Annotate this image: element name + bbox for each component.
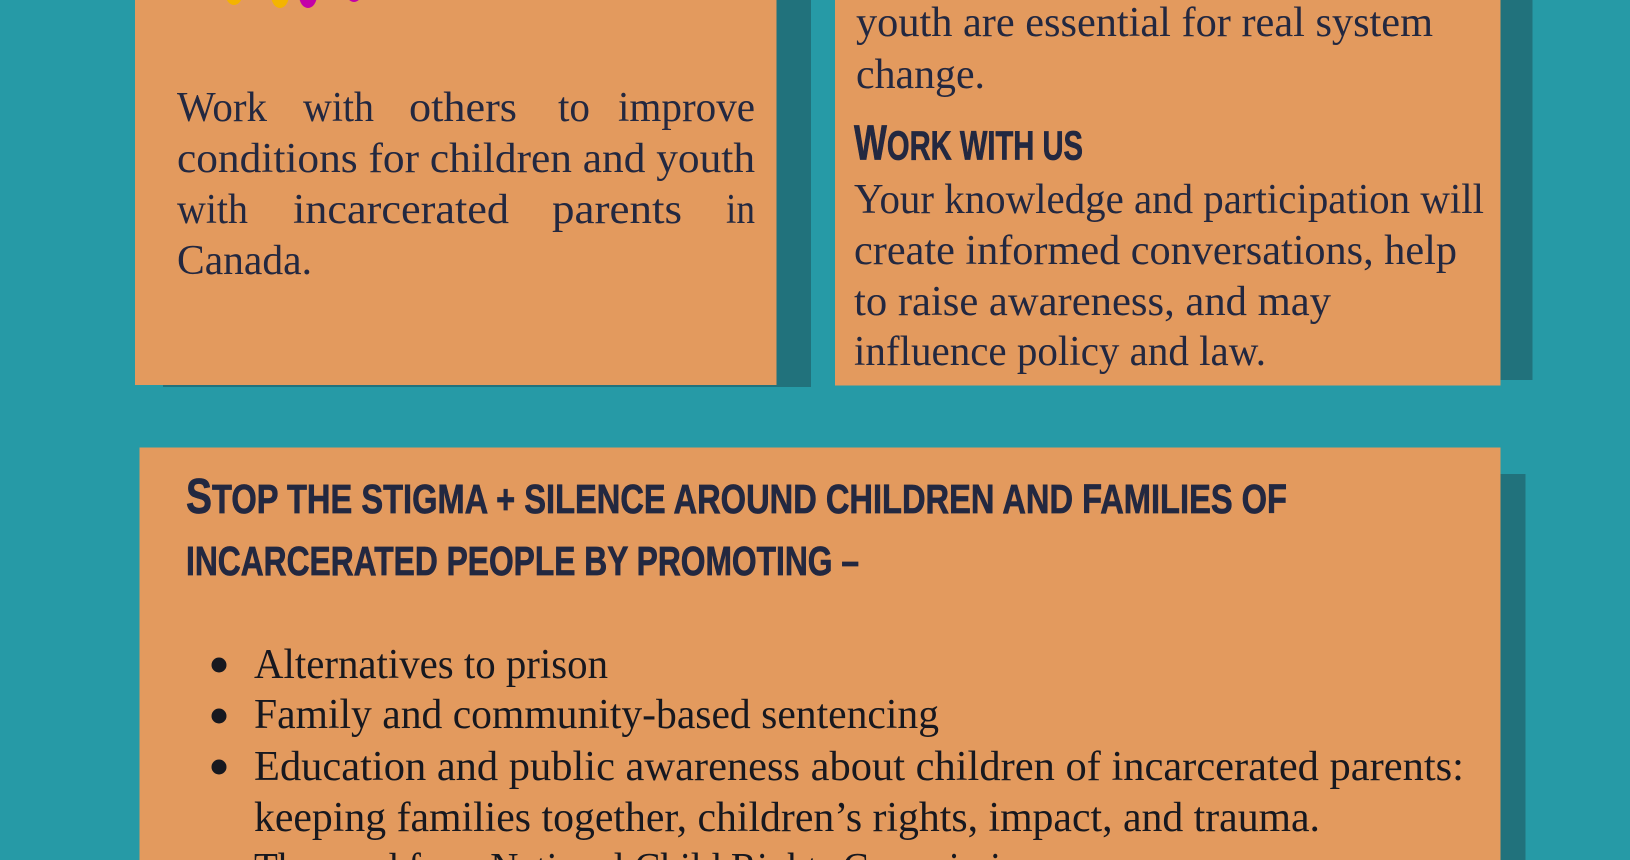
heading: stop the stigma	[186, 470, 1287, 584]
heading: stop the stigma: INCARCERATED PEOPLE BY PROMOTING –	[186, 538, 859, 584]
text: your knowledge: to raise awareness, and may	[854, 279, 1331, 325]
text: system change: change.	[856, 52, 985, 98]
panel: stop the stigma	[140, 448, 1526, 860]
heading: work with us: WORK WITH US	[854, 116, 1083, 170]
text: work with others: with	[177, 187, 248, 233]
text: your knowledge: Your knowledge and participation will	[854, 177, 1484, 223]
list: promoted actions: Education and public awareness about children of incarcerated parents:	[254, 744, 1464, 790]
text: work with others: with	[303, 85, 374, 131]
text: work with others: in	[726, 187, 755, 233]
text: your knowledge	[854, 177, 1484, 375]
icon: coloured dots	[225, 0, 363, 8]
text: your knowledge: create informed conversations, help	[854, 228, 1457, 274]
text: work with others: Canada.	[177, 238, 312, 284]
text: system change: youth are essential for real system	[856, 0, 1433, 46]
text: system change	[856, 0, 1433, 98]
text: work with others: conditions for children and youth	[177, 136, 755, 182]
text: your knowledge: influence policy and law.	[854, 329, 1266, 375]
list: promoted actions: Family and community-based sentencing	[254, 692, 939, 738]
panel: work with others	[135, 0, 811, 387]
list: promoted actions	[212, 642, 1464, 860]
list: promoted actions: keeping families together, children’s rights, impact, and trauma.	[254, 795, 1320, 841]
text: work with others: incarcerated	[293, 187, 509, 233]
text: work with others	[177, 85, 755, 284]
text: work with others: improve	[618, 85, 755, 131]
text: work with others: Work	[177, 85, 267, 131]
heading: stop the stigma: STOP THE STIGMA + SILENCE AROUND CHILDREN AND FAMILIES OF	[186, 470, 1287, 524]
panel: work with us	[835, 0, 1532, 386]
list: promoted actions: Alternatives to prison	[254, 642, 608, 688]
text: work with others: to	[558, 85, 590, 131]
text: work with others: others	[409, 85, 517, 131]
text: work with others: parents	[552, 187, 682, 233]
